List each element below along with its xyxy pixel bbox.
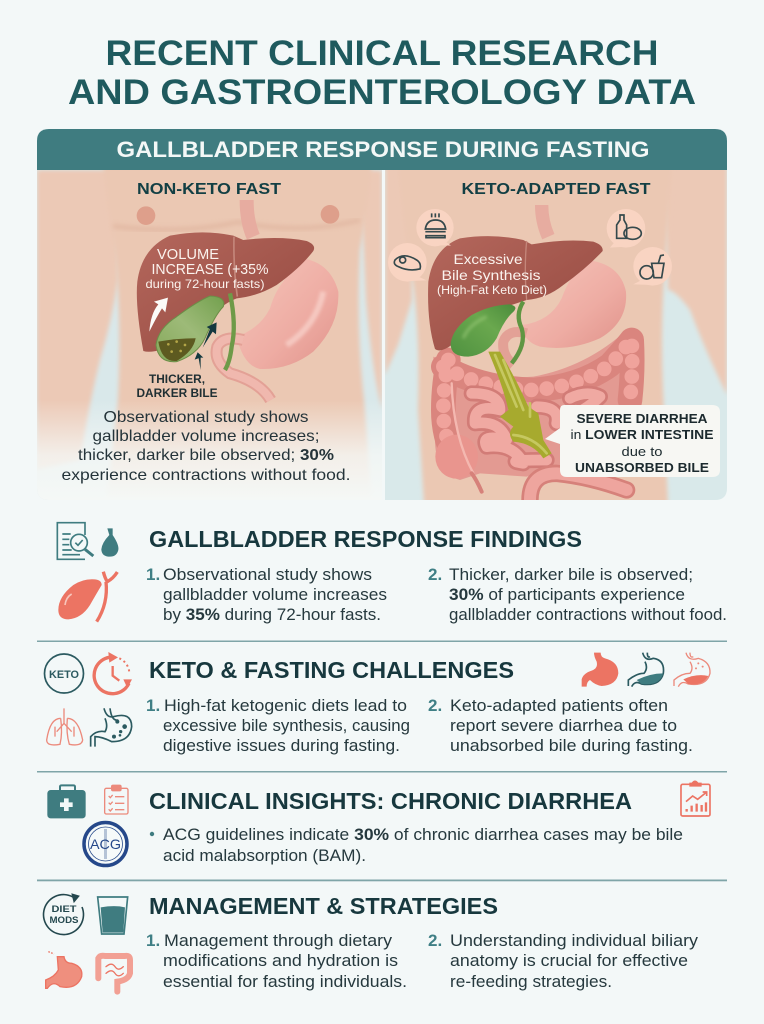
panel header (37, 129, 727, 170)
challenge 1: 1. (146, 696, 160, 715)
label: excessive bile synthesis: Excessive (454, 251, 523, 267)
icon: glass of water (98, 897, 128, 934)
icon: fasting clock (94, 652, 132, 694)
small intestine (472, 393, 600, 463)
food icons (394, 213, 664, 279)
finding 2: Thicker, darker bile is observed; (449, 565, 693, 584)
duodenum (217, 338, 271, 400)
section: clinical insights (47, 780, 710, 866)
text: observational study: thicker, darker bile observed; 30% (78, 447, 334, 464)
icon: stomach outline (91, 708, 132, 747)
icon: intestines (98, 956, 130, 992)
finding 2: 30% of participants experience (449, 585, 685, 604)
icons: stomach row (582, 653, 710, 687)
text: observational study: gallbladder volume increases; (92, 428, 320, 445)
label: thicker, darker bile: THICKER, (149, 374, 205, 386)
label: volume increase (146, 247, 269, 291)
section: keto and fasting challenges (44, 652, 710, 755)
finding 1: Observational study shows (163, 565, 372, 584)
liver (428, 236, 603, 350)
challenge 1 (146, 696, 410, 755)
label: excessive bile synthesis: Bile Synthesis (442, 267, 540, 283)
heading: MANAGEMENT & STRATEGIES (149, 893, 498, 919)
heading: GALLBLADDER RESPONSE FINDINGS (149, 526, 582, 552)
challenge 2: report severe diarrhea due to (450, 716, 677, 735)
icon: clipboard chart (681, 780, 710, 816)
strategy 2: re-feeding strategies. (450, 972, 612, 991)
icon: gallbladder (58, 572, 117, 622)
strategy 2 (428, 931, 699, 991)
challenge 2: Keto-adapted patients often (450, 696, 668, 715)
duodenum (503, 332, 527, 365)
illustration: non-keto fast (37, 165, 382, 505)
text: observational study: Observational study shows (104, 409, 308, 426)
title: RECENT CLINICAL RESEARCH (106, 34, 658, 73)
nipples (137, 206, 155, 225)
title: AND GASTROENTEROLOGY DATA (68, 73, 696, 112)
icon: medical case (47, 785, 86, 818)
finding 2: 2. (428, 565, 442, 584)
strategy 1: 1. (146, 931, 160, 950)
gallbladder (156, 296, 224, 362)
bile flow (488, 352, 552, 458)
panel: gallbladder response during fasting (37, 129, 727, 505)
callout: severe diarrhea: due to (622, 444, 662, 459)
challenge 2: unabsorbed bile during fasting. (450, 736, 693, 755)
label: thicker, darker bile (137, 374, 218, 397)
icon: keto badge (44, 654, 84, 693)
icon: bile drop (101, 528, 118, 557)
icon: lungs (47, 708, 83, 745)
callout: severe diarrhea: in LOWER INTESTINE (570, 427, 714, 442)
icon: diet mods: MODS (50, 915, 78, 925)
label: volume increase: INCREASE (+35% (152, 262, 269, 278)
icon: stomach (46, 952, 82, 988)
insight text (150, 825, 683, 865)
finding 1: gallbladder volume increases (163, 585, 387, 604)
heading: KETO & FASTING CHALLENGES (149, 657, 514, 683)
icon: diet mods (44, 894, 84, 935)
icon: report with magnifier (57, 523, 93, 559)
finding 1: by 35% during 72-hour fasts. (163, 605, 381, 624)
liver (137, 232, 314, 352)
heading: keto-adapted fast: KETO-ADAPTED FAST (462, 181, 651, 198)
strategy 2: Understanding individual biliary (450, 931, 699, 950)
callout: severe diarrhea: SEVERE DIARRHEA (576, 411, 708, 426)
callout: severe diarrhea: UNABSORBED BILE (575, 460, 709, 475)
icon: keto badge: KETO (49, 669, 79, 681)
label: excessive bile synthesis (437, 251, 547, 297)
esophagus (247, 200, 253, 237)
challenge 1: excessive bile synthesis, causing (163, 716, 410, 735)
large intestine (435, 340, 632, 500)
finding 2: gallbladder contractions without food. (449, 605, 727, 624)
label: volume increase: during 72-hour fasts) (146, 277, 264, 291)
strategy 1: Management through dietary (164, 931, 393, 950)
challenge 2: 2. (428, 696, 442, 715)
section: management and strategies (44, 893, 699, 992)
insight text: ACG guidelines indicate 30% of chronic diarrhea cases may be bile (163, 825, 683, 844)
challenge 1: digestive issues during fasting. (163, 736, 400, 755)
strategy 1: essential for fasting individuals. (163, 972, 407, 991)
strategy 1 (146, 931, 407, 991)
heading: non-keto fast: NON-KETO FAST (137, 181, 281, 198)
title (68, 34, 696, 112)
strategy 1: modifications and hydration is (163, 951, 398, 970)
icon: diet mods: DIET (52, 904, 77, 914)
arrow: dark (203, 322, 217, 348)
finding 2 (428, 565, 727, 624)
label: volume increase: VOLUME (157, 247, 219, 263)
label: excessive bile synthesis: (High-Fat Keto Diet) (437, 285, 547, 297)
strategy 2: anatomy is crucial for effective (450, 951, 688, 970)
intestine mass (433, 330, 642, 480)
panel header: GALLBLADDER RESPONSE DURING FASTING (116, 137, 650, 162)
finding 1: 1. (146, 565, 160, 584)
text: observational study: experience contractions without food. (62, 467, 350, 484)
icon: ACG seal (84, 822, 127, 866)
label: thicker, darker bile: DARKER BILE (136, 388, 218, 400)
speech bubbles (388, 209, 672, 286)
finding 1 (146, 565, 387, 624)
insight text: acid malabsorption (BAM). (163, 846, 366, 865)
callout: severe diarrhea (545, 405, 720, 477)
illustration: keto-adapted fast (385, 165, 727, 505)
arrow: white (149, 298, 168, 332)
icon: ACG seal: ACG (90, 836, 121, 852)
heading: CLINICAL INSIGHTS: CHRONIC DIARRHEA (149, 788, 632, 814)
icon: checklist (105, 785, 128, 814)
stomach (237, 258, 338, 369)
challenge 1: High-fat ketogenic diets lead to (164, 696, 407, 715)
text: observational study (62, 409, 350, 484)
challenge 2 (428, 696, 693, 755)
bile duct (512, 302, 523, 363)
strategy 2: 2. (428, 931, 442, 950)
stomach (522, 260, 626, 348)
gallbladder (451, 304, 515, 357)
bile duct (225, 293, 234, 370)
section: gallbladder response findings (57, 523, 727, 624)
esophagus (542, 205, 548, 237)
